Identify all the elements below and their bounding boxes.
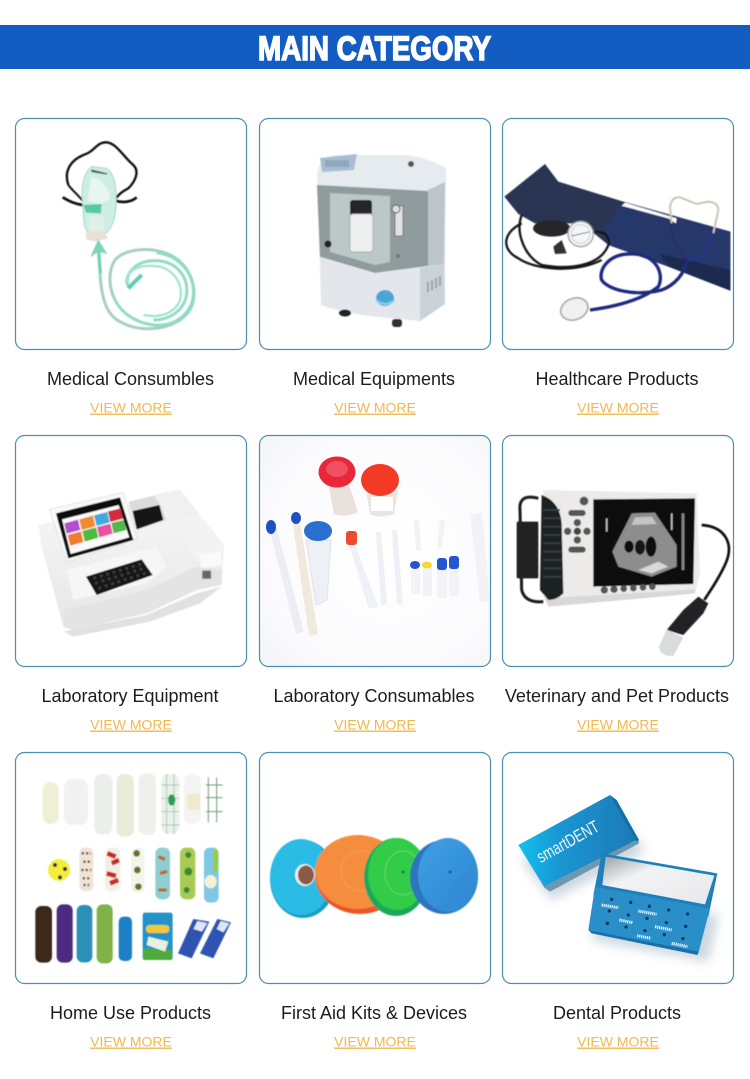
link: view more: VIEW MORE — [577, 1034, 659, 1050]
panel: Home Use Products — [16, 752, 246, 1050]
panel: Medical Consumbles — [16, 118, 246, 416]
card frame — [502, 752, 734, 984]
card frame — [502, 436, 734, 666]
icon: assorted adhesive bandages — [35, 773, 231, 963]
panel: Dental Products — [502, 752, 734, 1050]
icon: specimen cups, tubes and swabs — [266, 456, 490, 636]
panel: Laboratory Consumables — [260, 436, 490, 732]
icon: coloured bandage rolls — [270, 835, 478, 918]
icon: oxygen mask with tubing — [63, 142, 194, 329]
label: First Aid Kits & Devices — [281, 1003, 467, 1023]
card frame — [16, 118, 246, 350]
label: Medical Consumbles — [47, 369, 214, 389]
link: view more: VIEW MORE — [90, 400, 172, 416]
label: Medical Equipments — [293, 369, 455, 389]
card background — [260, 436, 490, 666]
header banner — [0, 25, 750, 69]
title: MAIN CATEGORY — [258, 30, 491, 68]
card frame — [260, 436, 490, 666]
link: view more: VIEW MORE — [334, 716, 416, 732]
panel: First Aid Kits & Devices — [260, 752, 490, 1050]
card frame — [260, 118, 490, 350]
icon: smartDENT bur holder — [518, 795, 718, 962]
panel: Healthcare Products — [502, 118, 734, 416]
brand text: smartDENT — [533, 816, 603, 867]
link: view more: VIEW MORE — [90, 716, 172, 732]
link: view more: VIEW MORE — [577, 400, 659, 416]
icon: analyser with touchscreen — [38, 489, 224, 637]
link: view more: VIEW MORE — [334, 400, 416, 416]
panel: Medical Equipments — [260, 118, 490, 416]
card frame — [16, 436, 246, 666]
card frame — [502, 118, 734, 350]
icon: portable ultrasound scanner — [517, 490, 729, 656]
link: view more: VIEW MORE — [577, 716, 659, 732]
label: Veterinary and Pet Products — [505, 686, 729, 706]
panel: Veterinary and Pet Products — [502, 436, 734, 732]
link: view more: VIEW MORE — [90, 1034, 172, 1050]
label: Laboratory Equipment — [41, 686, 219, 706]
card frame — [16, 752, 246, 984]
label: Home Use Products — [50, 1003, 211, 1023]
panel: Laboratory Equipment — [16, 436, 246, 732]
link: view more: VIEW MORE — [334, 1034, 416, 1050]
card frame — [260, 752, 490, 984]
label: Laboratory Consumables — [273, 686, 475, 706]
icon: blood pressure cuff and stethoscope — [504, 164, 730, 324]
label: Healthcare Products — [535, 369, 699, 389]
icon: oxygen concentrator — [317, 154, 446, 327]
label: Dental Products — [553, 1003, 681, 1023]
